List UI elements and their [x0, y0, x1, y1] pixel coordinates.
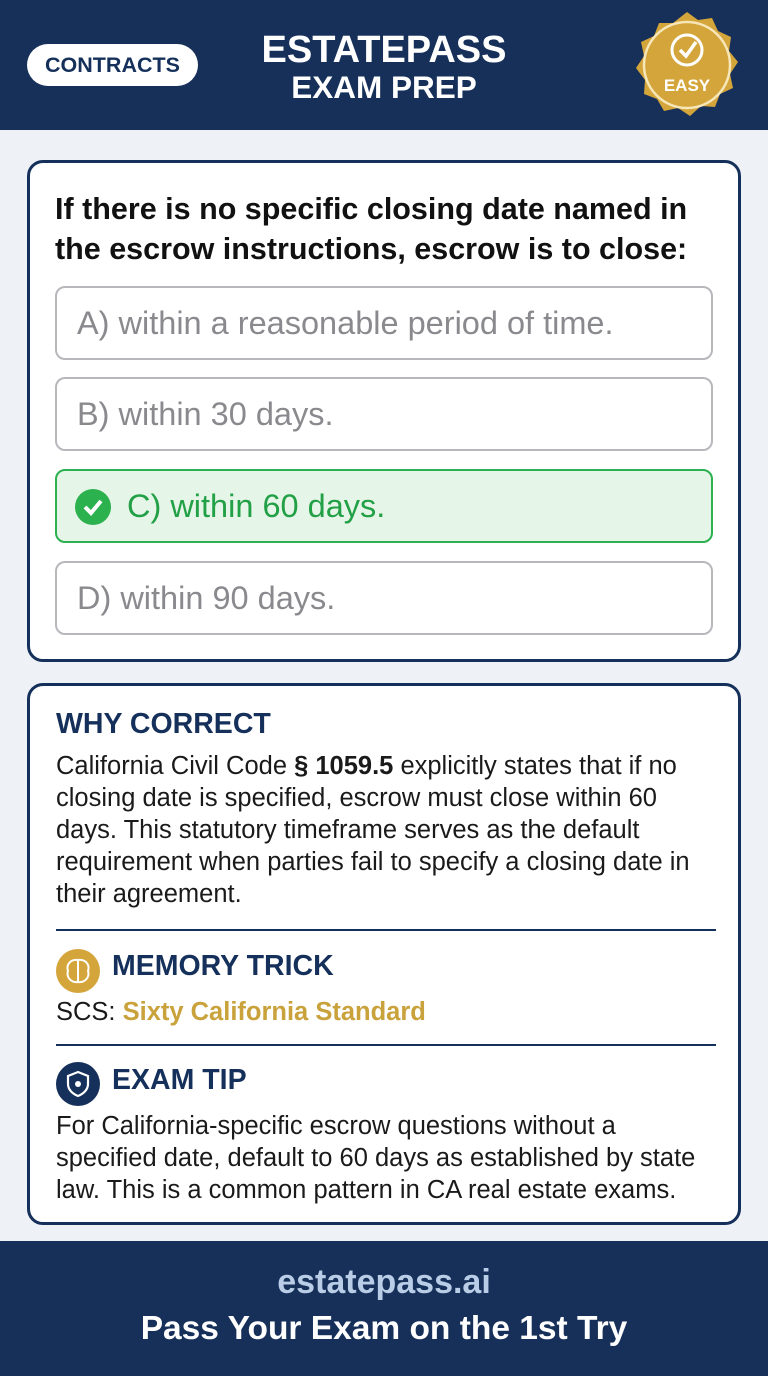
option A [55, 286, 713, 360]
title [262, 29, 506, 105]
option A: A) within a reasonable period of time. [77, 305, 614, 341]
option C correct [55, 469, 713, 543]
panel: question [27, 160, 741, 662]
option D [55, 561, 713, 635]
footer url: estatepass.ai [277, 1263, 491, 1301]
option B: B) within 30 days. [77, 396, 334, 432]
option D: D) within 90 days. [77, 580, 335, 616]
question text: If there is no specific closing date named in the escrow instructions, escrow is to close: [55, 192, 687, 266]
icon: shield [56, 1062, 100, 1106]
icon: brain [56, 949, 100, 993]
title: ESTATEPASS [262, 29, 506, 71]
heading: why correct: WHY CORRECT [56, 708, 271, 740]
text: why correct: California Civil Code § 1059.5 explicitly states that if no closing date is specified, escrow must close within 60 days. This statutory timeframe serves as the default requirement when parties fail to specify a closing date in their agreement. [56, 752, 690, 908]
badge: contracts [27, 44, 198, 86]
header [0, 0, 768, 130]
icon: easy seal [636, 12, 738, 116]
panel: explanation [27, 683, 741, 1225]
text: exam tip: For California-specific escrow questions without a specified date, default to 60 days as established by state law. This is a common pattern in CA real estate exams. [56, 1112, 695, 1204]
badge: contracts: CONTRACTS [45, 53, 180, 77]
heading: memory trick: MEMORY TRICK [112, 950, 334, 982]
heading: exam tip: EXAM TIP [112, 1064, 247, 1096]
footer [0, 1241, 768, 1376]
footer tagline: Pass Your Exam on the 1st Try [141, 1310, 627, 1347]
text: memory trick: SCS: Sixty California Standard [56, 998, 426, 1026]
option B [55, 377, 713, 451]
title: EXAM PREP [291, 69, 477, 105]
option C correct: C) within 60 days. [127, 488, 385, 524]
icon: easy seal: EASY [664, 76, 711, 95]
icon: check [75, 489, 111, 525]
